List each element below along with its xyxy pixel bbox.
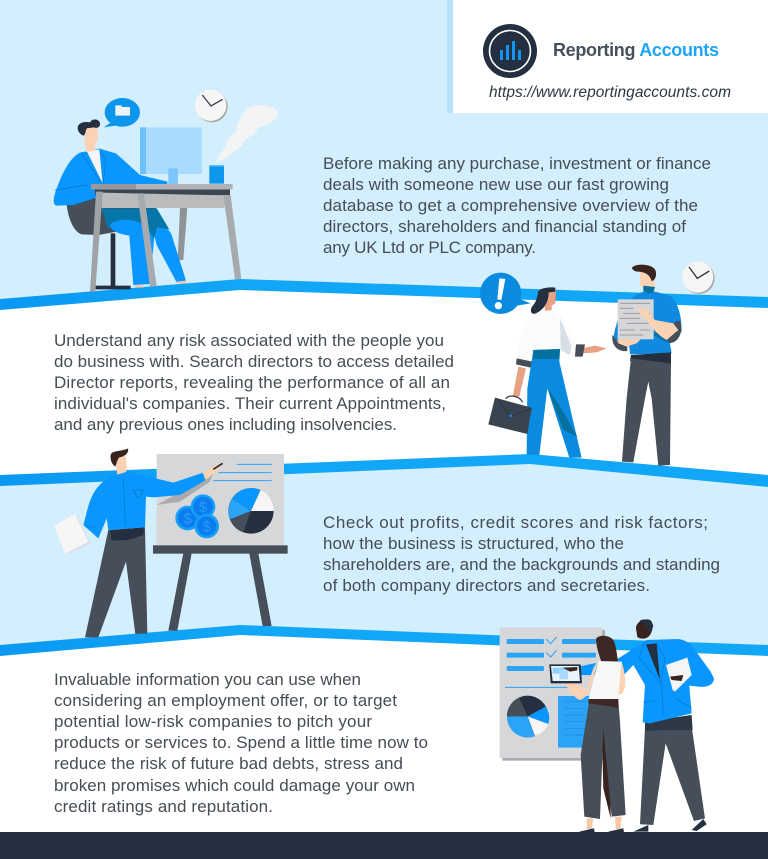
text block 3: how the business is structured, who the	[323, 534, 624, 553]
text block 4: reduce the risk of future bad debts, stress and	[54, 754, 403, 773]
trousers	[102, 208, 186, 285]
logo panel	[447, 0, 768, 113]
pie chart	[228, 488, 274, 534]
illustration: presenter with board	[54, 448, 288, 637]
footer bar	[0, 832, 768, 859]
presentation board	[153, 454, 288, 631]
icon: tablet	[549, 664, 582, 683]
icon: paper	[54, 514, 91, 554]
text block 4: credit ratings and reputation.	[54, 797, 273, 816]
text block 1: database to get a comprehensive overview of the	[323, 196, 698, 215]
icon: coins: $	[184, 511, 192, 527]
website url: https://www.reportingaccounts.com	[489, 84, 731, 101]
text block 2: and any previous ones including insolvencies.	[54, 415, 397, 434]
woman with tablet	[549, 636, 626, 832]
woman	[488, 287, 607, 458]
icon: coins: $	[203, 519, 211, 535]
text block 4: Invaluable information you can use when	[54, 670, 361, 689]
text block 2: do business with. Search directors to access detailed	[54, 352, 454, 371]
text block 1: deals with someone new use our fast growing	[323, 175, 669, 194]
briefcase	[488, 396, 532, 434]
illustration: team reviewing report	[500, 619, 714, 832]
arm shadow	[157, 473, 213, 505]
report board	[500, 627, 605, 761]
text block 4: considering an employment offer, or to target	[54, 691, 397, 710]
man in blazer	[563, 619, 714, 832]
icon: coins	[175, 494, 219, 538]
icon: alert bubble	[480, 273, 531, 314]
pie chart	[507, 696, 549, 738]
jacket	[54, 149, 167, 206]
icon: logo	[483, 24, 537, 78]
text block 2: individual's companies. Their current Appointments,	[54, 394, 446, 413]
band: wave divider 3	[0, 625, 768, 656]
text block 1: directors, shareholders and financial standing of	[323, 217, 686, 236]
illustration: woman and man talking	[480, 261, 715, 466]
text block 4: products or services to. Spend a little time now to	[54, 733, 428, 752]
text block 1	[323, 154, 711, 257]
text block 3: shareholders are, and the backgrounds and standing	[323, 555, 720, 574]
steam	[217, 105, 278, 163]
band: wave divider 1	[0, 279, 768, 310]
man with document	[612, 265, 682, 466]
text block 2	[54, 331, 454, 434]
paper	[666, 658, 692, 692]
text block 4	[54, 670, 428, 816]
text block 4: potential low-risk companies to pitch your	[54, 712, 372, 731]
illustration: man at desk	[54, 90, 278, 292]
icon: clock	[682, 261, 715, 294]
desk	[90, 184, 241, 292]
icon: coins: $	[199, 500, 207, 516]
band: wave divider 2	[0, 454, 768, 487]
text block 3	[323, 513, 720, 595]
monitor	[140, 127, 202, 184]
text block 1: Before making any purchase, investment or finance	[323, 154, 711, 173]
icon: clock	[195, 90, 228, 122]
brand name: Reporting Accounts	[553, 40, 719, 60]
text block 4: broken promises which could damage your own	[54, 776, 415, 795]
icon: speech bubble with folder	[104, 98, 140, 127]
text block 1: any UK Ltd or PLC company.	[323, 238, 536, 257]
chair	[67, 195, 157, 289]
text block 2: Director reports, revealing the performance of all an	[54, 373, 450, 392]
back desk leg	[178, 208, 187, 260]
text block 3: of both company directors and secretaries.	[323, 576, 650, 595]
text block 3: Check out profits, credit scores and risk factors;	[323, 513, 708, 532]
cup	[209, 165, 224, 184]
head	[78, 119, 100, 152]
text block 2: Understand any risk associated with the people you	[54, 331, 444, 350]
man presenting	[54, 448, 223, 637]
